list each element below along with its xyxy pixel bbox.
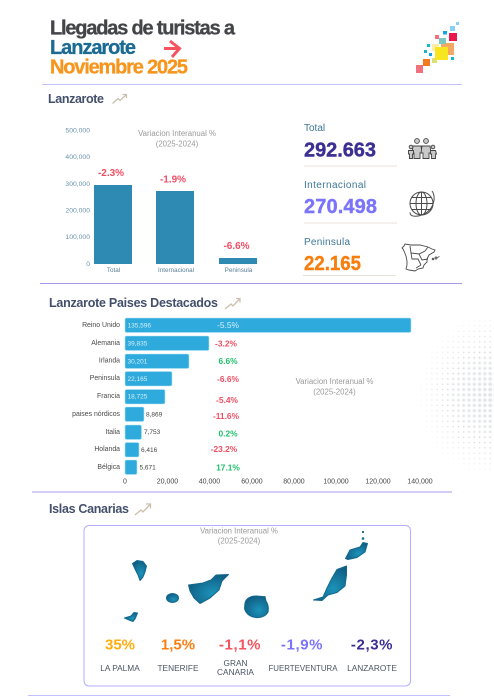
- stat: Peninsula: [303, 237, 396, 276]
- map of islands: [124, 531, 368, 622]
- percentages: -1,1%: [219, 636, 261, 654]
- title: Lanzarote: [50, 37, 136, 59]
- heading: Islas Canarias: Islas Canarias: [49, 502, 129, 516]
- variation values: -23.2%: [211, 444, 238, 454]
- x axis labels: Total: [107, 267, 120, 274]
- x axis labels: [107, 267, 253, 274]
- percentages: -1,9%: [281, 636, 323, 654]
- bar chart: countries: [72, 318, 433, 486]
- bar values: 6,416: [141, 447, 158, 454]
- title: [50, 18, 236, 78]
- country labels: Alemania: [91, 340, 120, 347]
- title: Llegadas de turistas a: [50, 18, 236, 40]
- icon: red arrow: [164, 41, 180, 57]
- island names: CANARIA: [217, 667, 254, 677]
- country labels: Peninsula: [90, 375, 120, 382]
- variation values: 0.2%: [218, 428, 238, 438]
- bar values: 135,596: [128, 322, 151, 330]
- y axis labels: 100,000: [65, 234, 90, 241]
- y axis labels: 300,000: [65, 181, 90, 188]
- percentages: 1,5%: [161, 636, 195, 654]
- country labels: Italia: [105, 429, 120, 436]
- x axis labels: 120,000: [365, 478, 391, 486]
- island: La Gomera: [166, 594, 178, 602]
- variation values: 17.1%: [216, 462, 240, 472]
- icon: family: [408, 139, 436, 158]
- stat: Internacional: 270.498: [304, 196, 377, 218]
- country labels: [72, 322, 121, 471]
- title: Noviembre 2025: [50, 56, 188, 78]
- variation values: -3.2%: [215, 338, 237, 348]
- chart note: (2025-2024): [218, 536, 261, 546]
- heading: Lanzarote: Lanzarote: [48, 92, 104, 106]
- bar values: 5,671: [140, 464, 156, 472]
- x axis labels: 40,000: [199, 478, 220, 486]
- bar values: 18,725: [128, 394, 148, 400]
- y axis labels: 200,000: [65, 208, 90, 214]
- chart note: [138, 129, 216, 148]
- x axis labels: 140,000: [407, 478, 433, 486]
- country labels: paises nórdicos: [72, 411, 121, 418]
- x axis labels: 60,000: [241, 478, 263, 486]
- x axis labels: Peninsula: [225, 267, 253, 274]
- x axis labels: 100,000: [323, 478, 349, 486]
- x axis labels: 80,000: [283, 478, 305, 486]
- variation values: 6.6%: [218, 356, 238, 366]
- bar values: 30,201: [128, 358, 148, 366]
- country labels: Holanda: [94, 446, 120, 453]
- y axis labels: 0: [86, 261, 90, 268]
- chart note: (2025-2024): [313, 388, 356, 396]
- bar values: [98, 168, 250, 252]
- bar values: -2.3%: [98, 168, 124, 179]
- bar values: 22,165: [128, 376, 148, 383]
- stat: Internacional: [304, 180, 397, 224]
- chart note: Variacion Interanual %: [138, 129, 216, 138]
- stat: Internacional: Internacional: [304, 180, 366, 191]
- y axis labels: 500,000: [65, 128, 90, 134]
- bar values: 8,869: [146, 412, 163, 418]
- bar values: -6.6%: [223, 241, 250, 252]
- stat: Total: [304, 123, 397, 166]
- island names: LANZAROTE: [347, 663, 397, 673]
- island: Tenerife: [188, 574, 228, 604]
- icon: map of Spain: [402, 244, 440, 271]
- x axis labels: [123, 478, 433, 486]
- bar values: 7,753: [144, 429, 161, 436]
- chart note: [296, 377, 373, 396]
- panel: Canary Islands: [84, 526, 410, 686]
- y axis labels: 400,000: [65, 154, 90, 161]
- island names: TENERIFE: [157, 663, 199, 673]
- island names: LA PALMA: [100, 663, 140, 673]
- island: La Palma: [132, 560, 146, 580]
- variation values: -5.4%: [216, 395, 238, 405]
- stat: Total: 292.663: [304, 140, 376, 162]
- stat: Peninsula: Peninsula: [304, 237, 350, 248]
- island names: GRAN: [224, 658, 247, 668]
- island names: [100, 658, 397, 677]
- stat: Total: Total: [304, 123, 325, 134]
- country labels: Francia: [97, 393, 120, 400]
- x axis labels: 0: [123, 478, 127, 486]
- bars: [125, 318, 411, 474]
- icon: trend arrow: [135, 504, 150, 515]
- x axis labels: Internacional: [158, 267, 194, 274]
- icon: globe: [410, 191, 434, 216]
- chart note: Variacion Interanual %: [200, 526, 278, 536]
- chart note: Variacion Interanual %: [296, 377, 373, 386]
- heading: Lanzarote Paises Destacados: Lanzarote Paises Destacados: [49, 296, 218, 310]
- bars: [94, 185, 257, 264]
- bar values: 39,835: [128, 340, 148, 348]
- y axis labels: [65, 128, 90, 268]
- island names: FUERTEVENTURA: [268, 663, 338, 673]
- variation values: -6.6%: [217, 374, 239, 384]
- percentages: [105, 636, 393, 654]
- logo: coloured squares: [416, 22, 459, 73]
- chart note: (2025-2024): [156, 140, 199, 148]
- country labels: Bélgica: [97, 464, 120, 471]
- country labels: Reino Unido: [82, 322, 120, 329]
- island: El Hierro: [124, 612, 138, 622]
- stat: Peninsula: 22.165: [304, 253, 361, 275]
- percentages: -2,3%: [351, 636, 393, 654]
- variation values: [211, 320, 240, 472]
- island: Gran Canaria: [244, 596, 268, 618]
- bar values: [128, 322, 163, 472]
- variation values: -11.6%: [213, 411, 240, 421]
- percentages: 35%: [105, 636, 135, 654]
- country labels: Irlanda: [99, 358, 120, 364]
- island: Fuerteventura: [314, 566, 346, 600]
- bar values: -1.9%: [160, 174, 186, 186]
- icon: trend arrow: [112, 94, 126, 104]
- bar chart: Lanzarote arrivals: [65, 128, 257, 274]
- island: Lanzarote: [346, 531, 368, 560]
- x axis labels: 20,000: [157, 478, 178, 486]
- halftone dots background: [426, 320, 494, 470]
- chart note: [200, 526, 278, 546]
- icon: trend arrow: [225, 298, 240, 309]
- variation values: -5.5%: [217, 320, 239, 330]
